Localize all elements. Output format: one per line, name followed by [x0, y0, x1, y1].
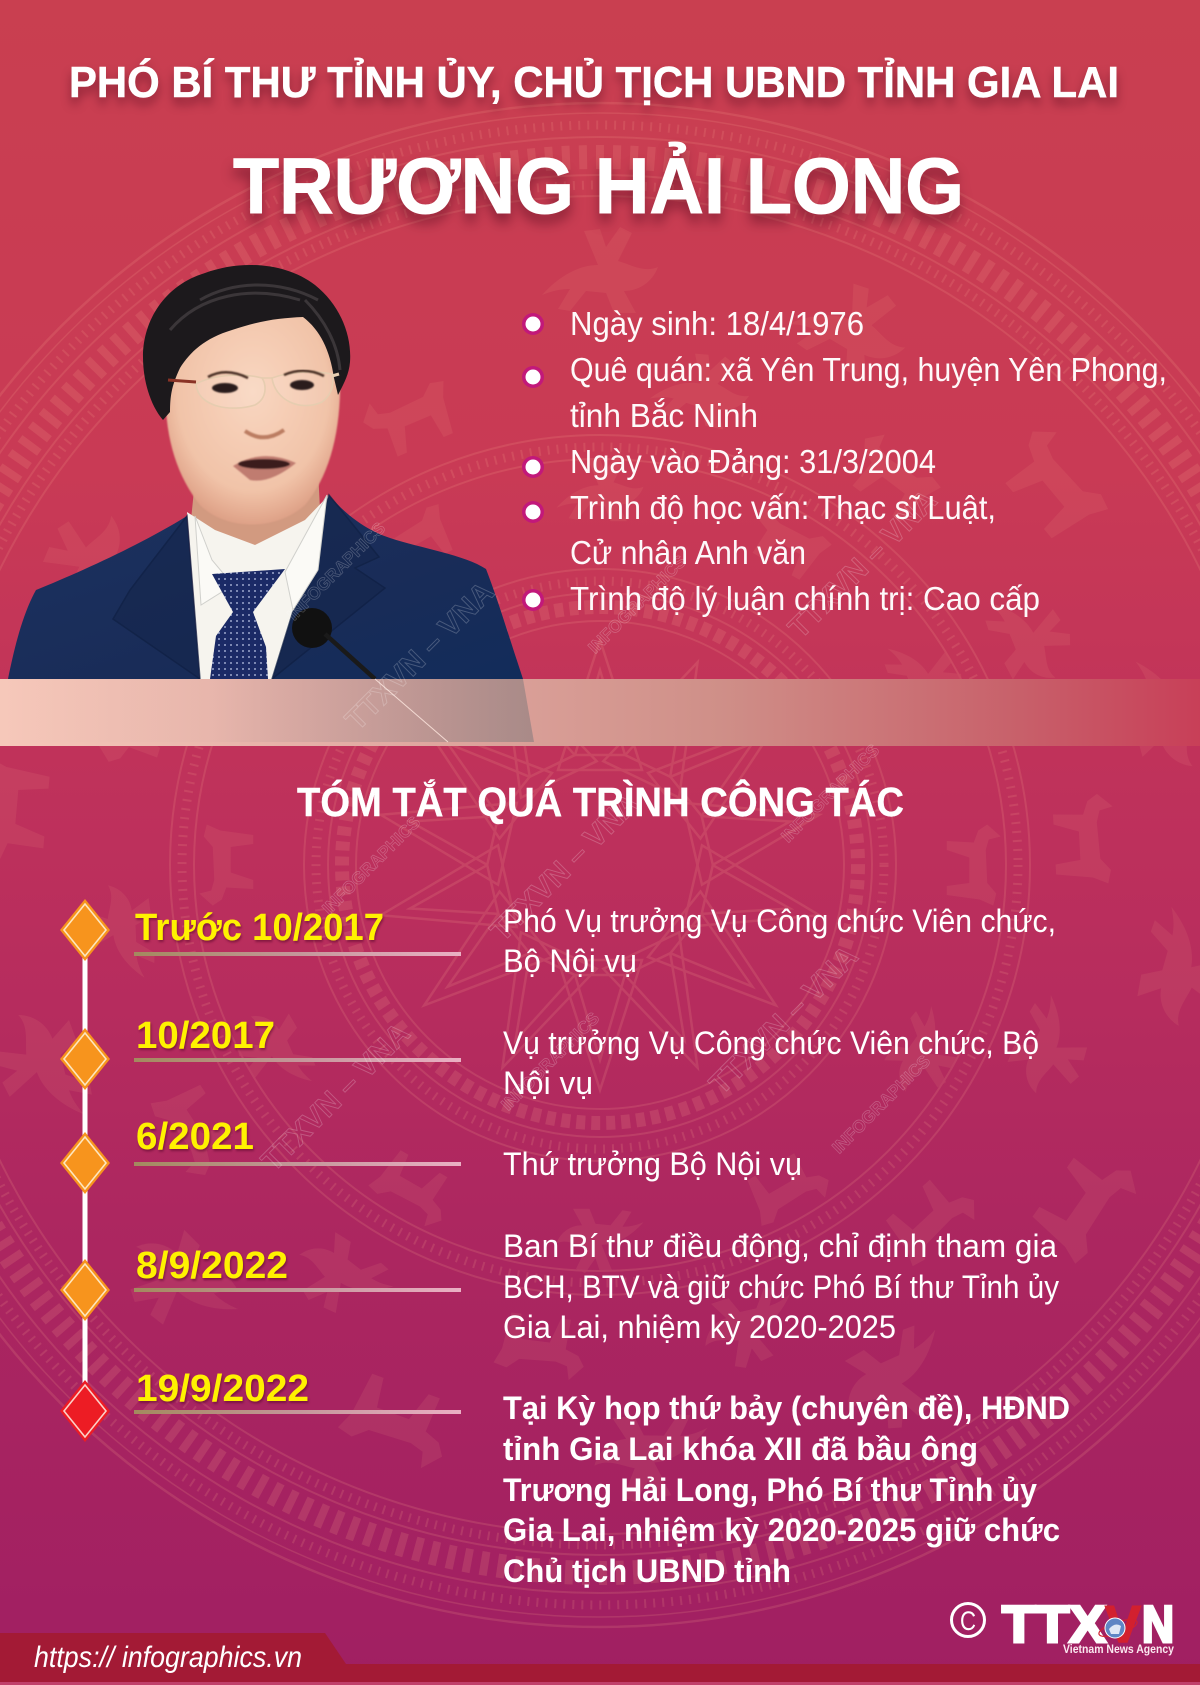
entry: 19/9/2022: Tại Kỳ họp thứ bảy (chuyên đề), HĐND	[503, 1390, 1070, 1426]
entry: 19/9/2022: Trương Hải Long, Phó Bí thư Tỉnh ủy	[503, 1472, 1037, 1508]
gradient band under portrait	[0, 679, 1200, 746]
watermarks: TTXVN – VNA	[703, 940, 864, 1101]
watermarks: TTXVN – VNA	[339, 576, 500, 737]
bullet: hometown: tỉnh Bắc Ninh	[570, 397, 758, 434]
globe	[1097, 1616, 1139, 1640]
watermarks: INFOGRAPHICS	[498, 1009, 603, 1114]
lapels	[113, 495, 385, 679]
footer bar	[0, 1633, 1200, 1685]
copyright mark: C	[960, 1606, 976, 1636]
section heading: TÓM TẮT QUÁ TRÌNH CÔNG TÁC	[297, 779, 904, 825]
entry: 19/9/2022: 19/9/2022	[136, 1368, 309, 1410]
website url: https:// infographics.vn	[34, 1641, 302, 1674]
bullet: party date: Ngày vào Đảng: 31/3/2004	[570, 443, 936, 480]
bullet: hometown: Quê quán: xã Yên Trung, huyện Yên Phong,	[570, 351, 1167, 388]
watermarks: TTXVN – VNA	[484, 787, 645, 948]
entry: 10/2017	[60, 1015, 1039, 1101]
eyes	[208, 371, 324, 393]
microphone	[292, 608, 332, 648]
entry: 8/9/2022: 8/9/2022	[136, 1245, 288, 1287]
bullet: hometown	[522, 351, 1167, 434]
N wordmark: N	[1142, 1596, 1174, 1654]
shirt	[187, 495, 329, 679]
entry: 10/2017: Vụ trưởng Vụ Công chức Viên chức, Bộ	[503, 1025, 1039, 1061]
entry: 8/9/2022: BCH, BTV và giữ chức Phó Bí thư Tỉnh ủy	[503, 1269, 1059, 1305]
copyright mark	[952, 1604, 984, 1636]
watermarks: INFOGRAPHICS	[778, 741, 883, 846]
entry: 8/9/2022: Gia Lai, nhiệm kỳ 2020-2025	[503, 1309, 896, 1345]
bullet: education: Trình độ học vấn: Thạc sĩ Luật,	[570, 489, 996, 526]
entry: 10/2017: 10/2017	[136, 1015, 275, 1057]
watermarks: TTXVN – VNA	[782, 484, 943, 645]
portrait photo	[8, 265, 523, 679]
suit jacket	[8, 495, 523, 679]
timeline	[60, 899, 1070, 1589]
entry: 6/2021: Thứ trưởng Bộ Nội vụ	[503, 1146, 802, 1182]
timeline spine	[82, 930, 88, 1411]
bullet: birth date: Ngày sinh: 18/4/1976	[570, 305, 864, 342]
watermarks: INFOGRAPHICS	[319, 813, 424, 918]
red V: V	[1105, 1596, 1141, 1654]
entry: before 10/2017: Phó Vụ trưởng Vụ Công chức Viên chức,	[503, 903, 1056, 939]
nose and mouth	[233, 430, 296, 481]
profile bullet list	[522, 305, 1167, 617]
entry: 19/9/2022: Gia Lai, nhiệm kỳ 2020-2025 giữ chức	[503, 1512, 1060, 1548]
neck	[190, 470, 320, 570]
hair	[143, 265, 350, 420]
glasses	[168, 372, 339, 408]
watermarks: INFOGRAPHICS	[284, 519, 389, 624]
entry: 10/2017: Nội vụ	[503, 1065, 593, 1101]
face	[166, 296, 340, 525]
collar	[195, 495, 327, 610]
entry: 6/2021	[60, 1116, 802, 1194]
title: name: TRƯƠNG HẢI LONG	[233, 141, 964, 230]
title: position: PHÓ BÍ THƯ TỈNH ỦY, CHỦ TỊCH UBND TỈNH GIA LAI	[69, 56, 1119, 107]
entry: 8/9/2022	[60, 1228, 1059, 1345]
entry: 8/9/2022: Ban Bí thư điều động, chỉ định tham gia	[503, 1228, 1057, 1264]
TTXVN logo	[952, 1596, 1175, 1656]
entry: before 10/2017	[60, 899, 1056, 979]
bullet: political theory: Trình độ lý luận chính trị: Cao cấp	[570, 580, 1040, 617]
watermarks	[255, 484, 943, 1178]
agency name: Vietnam News Agency	[1063, 1644, 1175, 1656]
bullet: education: Cử nhân Anh văn	[570, 534, 806, 571]
entry: 19/9/2022: tỉnh Gia Lai khóa XII đã bầu ông	[503, 1431, 978, 1467]
entry: 6/2021: 6/2021	[136, 1116, 254, 1158]
watermarks: TTXVN – VNA	[255, 1017, 416, 1178]
bullet: education	[522, 489, 996, 571]
entry: before 10/2017: Trước 10/2017	[135, 907, 384, 949]
watermarks: INFOGRAPHICS	[829, 1052, 934, 1157]
entry: 19/9/2022: Chủ tịch UBND tỉnh	[503, 1553, 791, 1589]
entry: 19/9/2022	[60, 1368, 1070, 1589]
necktie	[210, 569, 285, 679]
TTX wordmark: TTX	[1002, 1596, 1106, 1654]
entry: before 10/2017: Bộ Nội vụ	[503, 943, 637, 979]
watermarks: INFOGRAPHICS	[585, 552, 690, 657]
